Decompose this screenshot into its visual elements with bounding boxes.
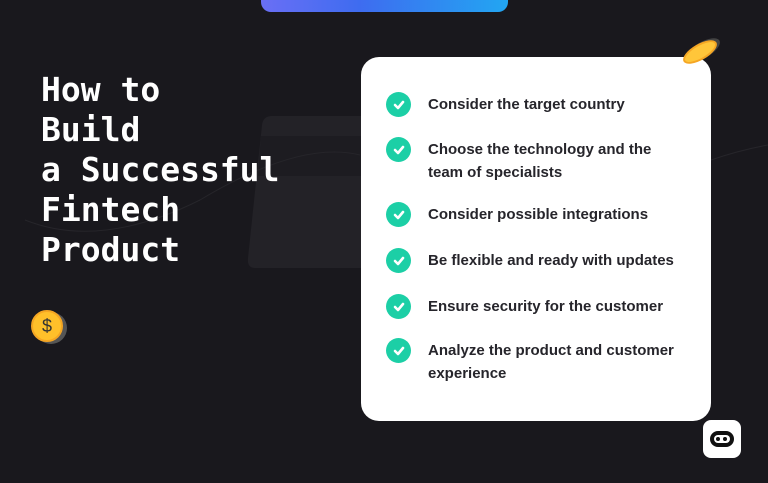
item 6: Analyze the product and customer experience (428, 342, 674, 382)
title (41, 70, 279, 269)
item 1 (386, 92, 625, 117)
top gradient bar (261, 0, 508, 12)
icon: tilted coin (683, 38, 720, 64)
item 4: Be flexible and ready with updates (428, 252, 674, 269)
item 3: Consider possible integrations (428, 206, 648, 223)
icon: dollar coin: $ (42, 316, 52, 336)
title: How to (41, 70, 160, 109)
icon: dollar coin (31, 310, 67, 344)
title: Build (41, 110, 140, 149)
title: Fintech (41, 190, 180, 229)
item 5 (386, 294, 663, 319)
icon: robot logo (703, 420, 741, 458)
item 4 (386, 248, 674, 273)
panel: checklist card (361, 57, 711, 421)
title: a Successful (41, 150, 279, 189)
item 1: Consider the target country (428, 96, 625, 113)
item 5: Ensure security for the customer (428, 298, 663, 315)
item 2: Choose the technology and the team of specialists (428, 141, 651, 181)
item 3 (386, 202, 648, 227)
title: Product (41, 230, 180, 269)
